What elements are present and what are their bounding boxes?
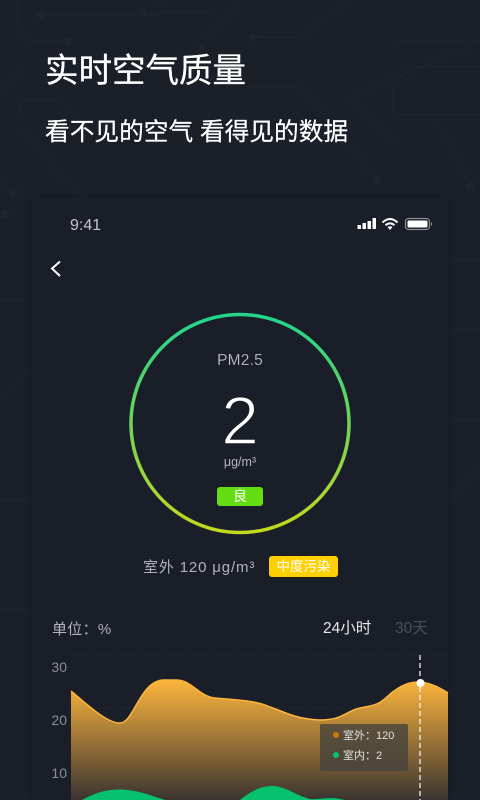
legend: indoor: 室内：2 xyxy=(343,750,382,762)
status bar time: 9:41 xyxy=(70,217,101,234)
panel: phone screen xyxy=(32,198,448,800)
badge: moderate pollution xyxy=(269,556,338,577)
label: PM2.5: PM2.5 xyxy=(217,352,263,369)
unit label: 单位：% xyxy=(52,621,112,638)
area chart xyxy=(70,654,448,800)
title: 实时空气质量 xyxy=(45,53,246,90)
y axis labels: 30 xyxy=(51,659,67,675)
outdoor reading: 室外 120 μg/m³ xyxy=(143,559,255,576)
tab: 24 hours: 24小时 xyxy=(323,620,371,637)
gauge ring xyxy=(129,312,351,534)
tooltip xyxy=(320,724,408,771)
tab: 30 days: 30天 xyxy=(395,620,428,637)
badge: good xyxy=(217,487,263,506)
legend: outdoor: 室外：120 xyxy=(343,730,394,742)
icon: back arrow xyxy=(50,260,61,277)
y axis labels: 10 xyxy=(51,765,67,781)
value: 2: 2 xyxy=(221,383,259,459)
y axis labels xyxy=(51,659,67,781)
badge: moderate pollution: 中度污染 xyxy=(276,559,330,574)
badge: good: 良 xyxy=(233,488,247,504)
icon: status icons xyxy=(358,218,432,230)
y axis labels: 20 xyxy=(51,712,67,728)
subtitle: 看不见的空气 看得见的数据 xyxy=(45,119,348,146)
unit: μg/m³ xyxy=(224,455,256,469)
